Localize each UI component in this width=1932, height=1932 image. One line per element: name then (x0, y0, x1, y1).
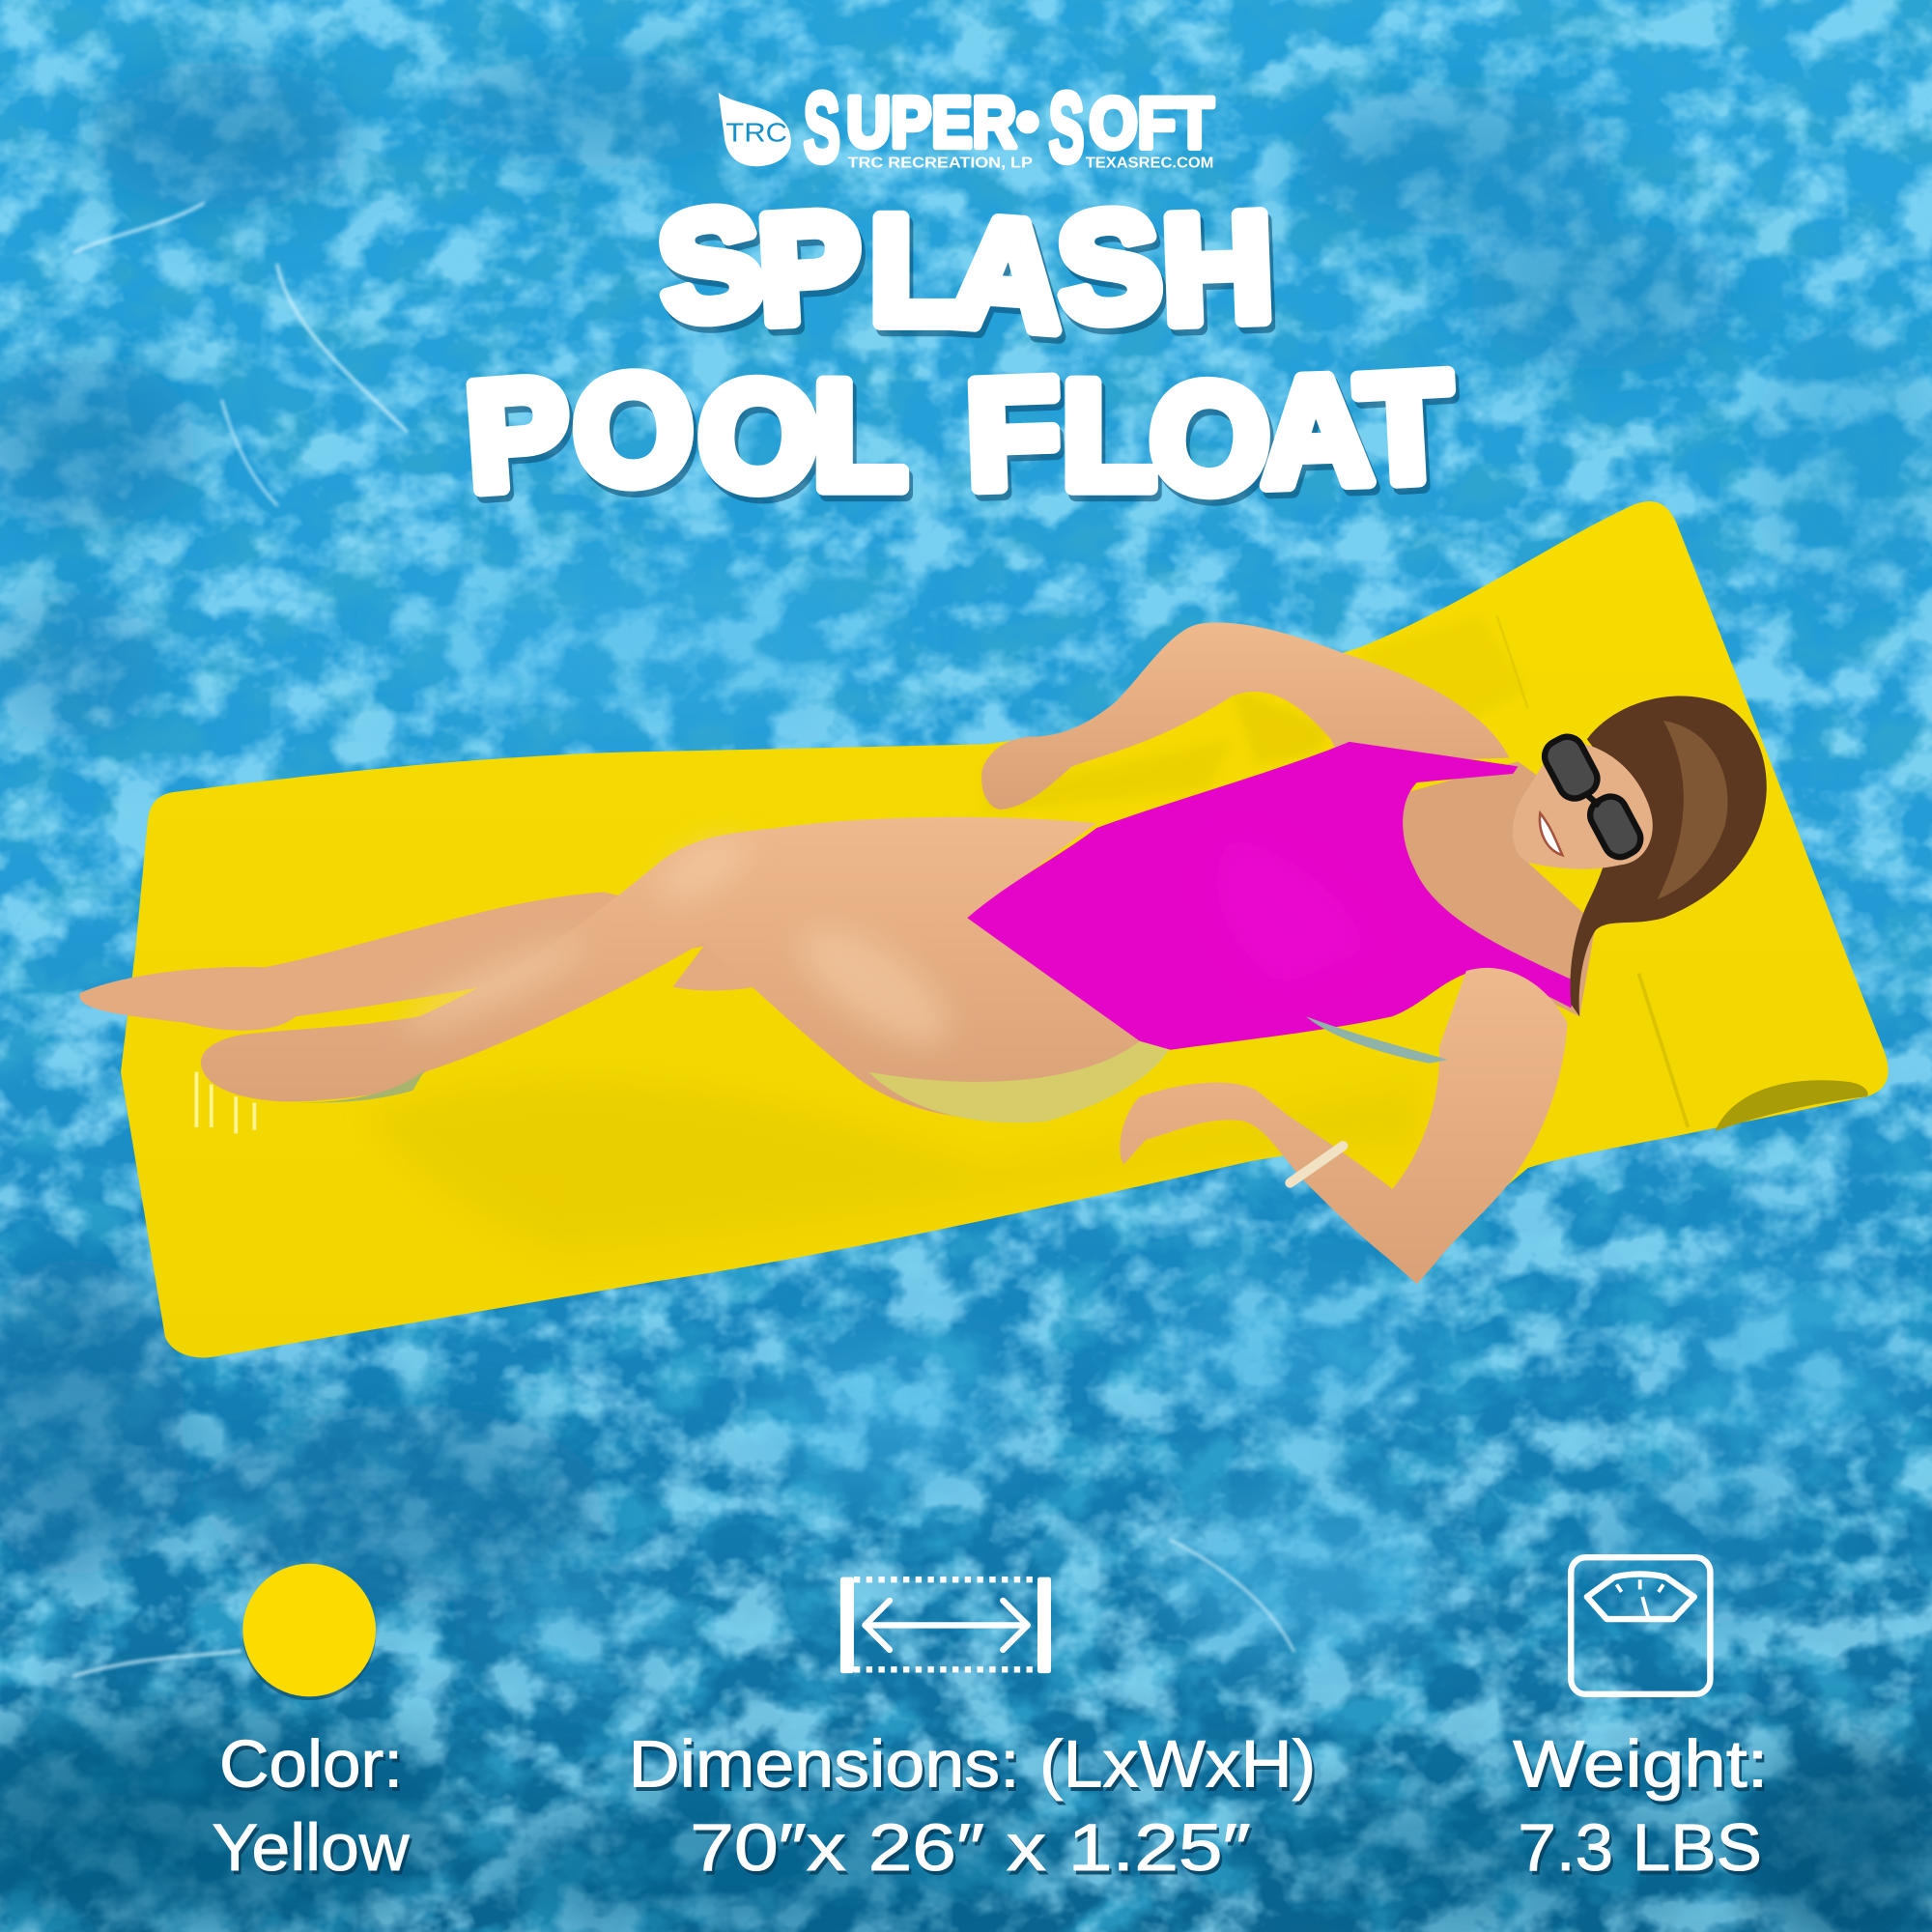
front leg and hip (201, 817, 1152, 1120)
feature: color (212, 1564, 412, 1889)
top arm (981, 622, 1509, 810)
hair highlight (1658, 721, 1728, 899)
icon: TRC water drop (719, 93, 791, 166)
color label (212, 1726, 412, 1889)
icon: TRC water drop: TRC (725, 118, 787, 148)
weight label: 7.3 LBS (1520, 1814, 1765, 1889)
title shadow (465, 181, 1461, 535)
logo: Super-Soft brand (719, 72, 1213, 183)
color label: Yellow (214, 1814, 412, 1889)
underwater glints (195, 1072, 256, 1133)
color label: Yellow (212, 1810, 410, 1885)
swimsuit highlight (1217, 838, 1368, 985)
color label: Color: (219, 1726, 403, 1801)
face (1513, 743, 1653, 869)
leg highlights (396, 825, 965, 1064)
logo wordmark (804, 72, 1213, 183)
feature: weight (1513, 1557, 1771, 1889)
icon: yellow swatch (242, 1564, 376, 1700)
weight label: Weight: (1516, 1730, 1771, 1804)
title shadow: SPLASH (655, 181, 1280, 369)
foam pool float with woman (79, 501, 1889, 1357)
weight label: Weight: (1513, 1726, 1768, 1801)
float shading (370, 616, 1688, 1251)
float roll end (1716, 1080, 1868, 1131)
color label: Color: (222, 1730, 406, 1804)
under-arm water (1306, 1016, 1448, 1064)
lower arm (1120, 968, 1567, 1284)
weight label (1513, 1726, 1771, 1889)
woman (79, 622, 1767, 1284)
back leg (79, 892, 761, 1031)
hair (1570, 696, 1767, 1016)
sunglasses (1539, 731, 1646, 863)
dimensions label: Dimensions: (LxWxH) (631, 1730, 1319, 1804)
logo tagline left: TRC RECREATION, LP (848, 155, 1033, 171)
logo wordmark: S (804, 72, 840, 183)
logo wordmark: S (1048, 72, 1084, 183)
icon: dimensions arrow (840, 1577, 1051, 1673)
logo wordmark: OFT (1090, 83, 1213, 163)
title line 1: SPLASH (651, 175, 1276, 363)
smile (1540, 813, 1562, 855)
submerged hip (868, 1041, 1171, 1122)
torso skin (1398, 761, 1596, 1016)
logo tagline right: TEXASREC.COM (1086, 155, 1213, 171)
dimensions label: 70″x 26″ x 1.25″ (690, 1810, 1251, 1885)
weight label: 7.3 LBS (1518, 1810, 1762, 1885)
float mat (121, 501, 1889, 1357)
icon: bathroom scale (1571, 1557, 1710, 1694)
title line 2: POOL FLOAT (461, 340, 1457, 528)
title shadow: POOL FLOAT (465, 347, 1461, 535)
bracelet (1290, 1146, 1343, 1182)
logo wordmark: UPER (846, 82, 1016, 162)
feature: dimensions (629, 1577, 1319, 1889)
title (461, 175, 1461, 535)
swimsuit (967, 742, 1577, 1050)
foot shadow (296, 1069, 425, 1103)
dimensions label: Dimensions: (LxWxH) (629, 1726, 1316, 1801)
dimensions label (629, 1726, 1319, 1889)
dimensions label: 70″x 26″ x 1.25″ (693, 1814, 1253, 1889)
